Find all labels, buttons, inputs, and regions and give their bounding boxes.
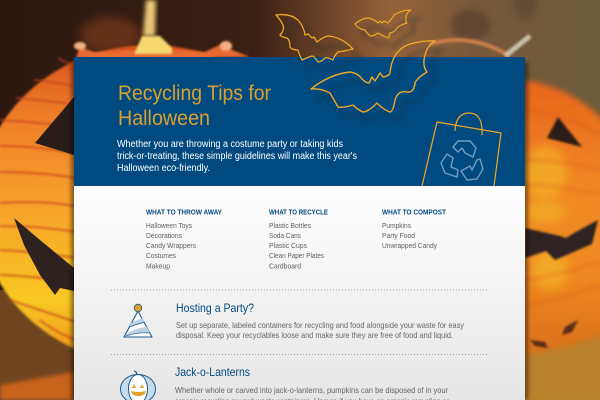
title — [118, 82, 271, 130]
left pumpkin mouth — [14, 218, 74, 295]
right pumpkin — [520, 80, 600, 355]
intro text: Halloween eco-friendly. — [117, 163, 210, 174]
column: what to recycle: Clean Paper Plates — [269, 251, 324, 260]
intro text: Whether you are throwing a costume party or taking kids — [117, 139, 343, 150]
section: hosting a party — [176, 301, 465, 340]
section: hosting a party: disposal. Keep your recyclables loose and make sure they are free of food and liquid. — [176, 330, 453, 340]
icon: party hat — [124, 304, 152, 337]
bat shadows — [283, 19, 442, 121]
column: what to recycle: Soda Cans — [269, 231, 301, 240]
column: what to compost: Party Food — [382, 231, 415, 240]
icon: small bat — [355, 10, 411, 38]
column: what to throw away: Costumes — [146, 251, 176, 260]
left pumpkin eye — [35, 97, 74, 155]
column: what to throw away: Halloween Toys — [146, 221, 192, 230]
title: Halloween — [118, 107, 210, 130]
panel: header — [74, 57, 525, 186]
column: what to compost: WHAT TO COMPOST — [382, 210, 447, 216]
column: what to recycle: Plastic Cups — [269, 241, 307, 250]
icon: medium bat — [276, 15, 353, 62]
intro text — [117, 139, 357, 174]
section: hosting a party: Hosting a Party? — [176, 301, 254, 315]
section: jack-o-lanterns: Jack-o-Lanterns — [175, 365, 250, 379]
column: what to recycle — [269, 210, 328, 270]
column: what to compost: Unwrapped Candy — [382, 241, 437, 250]
column: what to compost — [382, 210, 447, 250]
section: jack-o-lanterns: Whether whole or carved into jack-o-lanterns, pumpkins can be disposed of in your — [175, 385, 448, 395]
panel shadow — [71, 62, 528, 400]
column: what to throw away: Decorations — [146, 231, 182, 240]
panel: white content area — [74, 186, 525, 400]
left pumpkin — [0, 36, 322, 365]
intro text: trick-or-treating, these simple guidelines will make this year's — [117, 151, 357, 162]
icon: shopping bag with recycling symbol — [422, 113, 501, 186]
title: Recycling Tips for — [118, 82, 271, 105]
column: what to recycle: Plastic Bottles — [269, 221, 311, 230]
column: what to recycle: Cardboard — [269, 262, 301, 270]
column: what to recycle: WHAT TO RECYCLE — [269, 210, 328, 216]
icon: large bat — [311, 41, 435, 112]
column: what to throw away — [146, 210, 222, 270]
pumpkin stem — [143, 0, 156, 36]
column: what to throw away: Makeup — [146, 262, 170, 270]
icon: jack-o-lantern — [120, 371, 156, 400]
section: jack-o-lanterns — [175, 365, 449, 400]
section: hosting a party: Set up separate, labeled containers for recycling and food alongside your waste for easy — [176, 320, 465, 330]
column: what to compost: Pumpkins — [382, 221, 411, 230]
column: what to throw away: WHAT TO THROW AWAY — [146, 210, 222, 216]
pumpkin handle — [430, 40, 510, 56]
column: what to throw away: Candy Wrappers — [146, 241, 196, 250]
